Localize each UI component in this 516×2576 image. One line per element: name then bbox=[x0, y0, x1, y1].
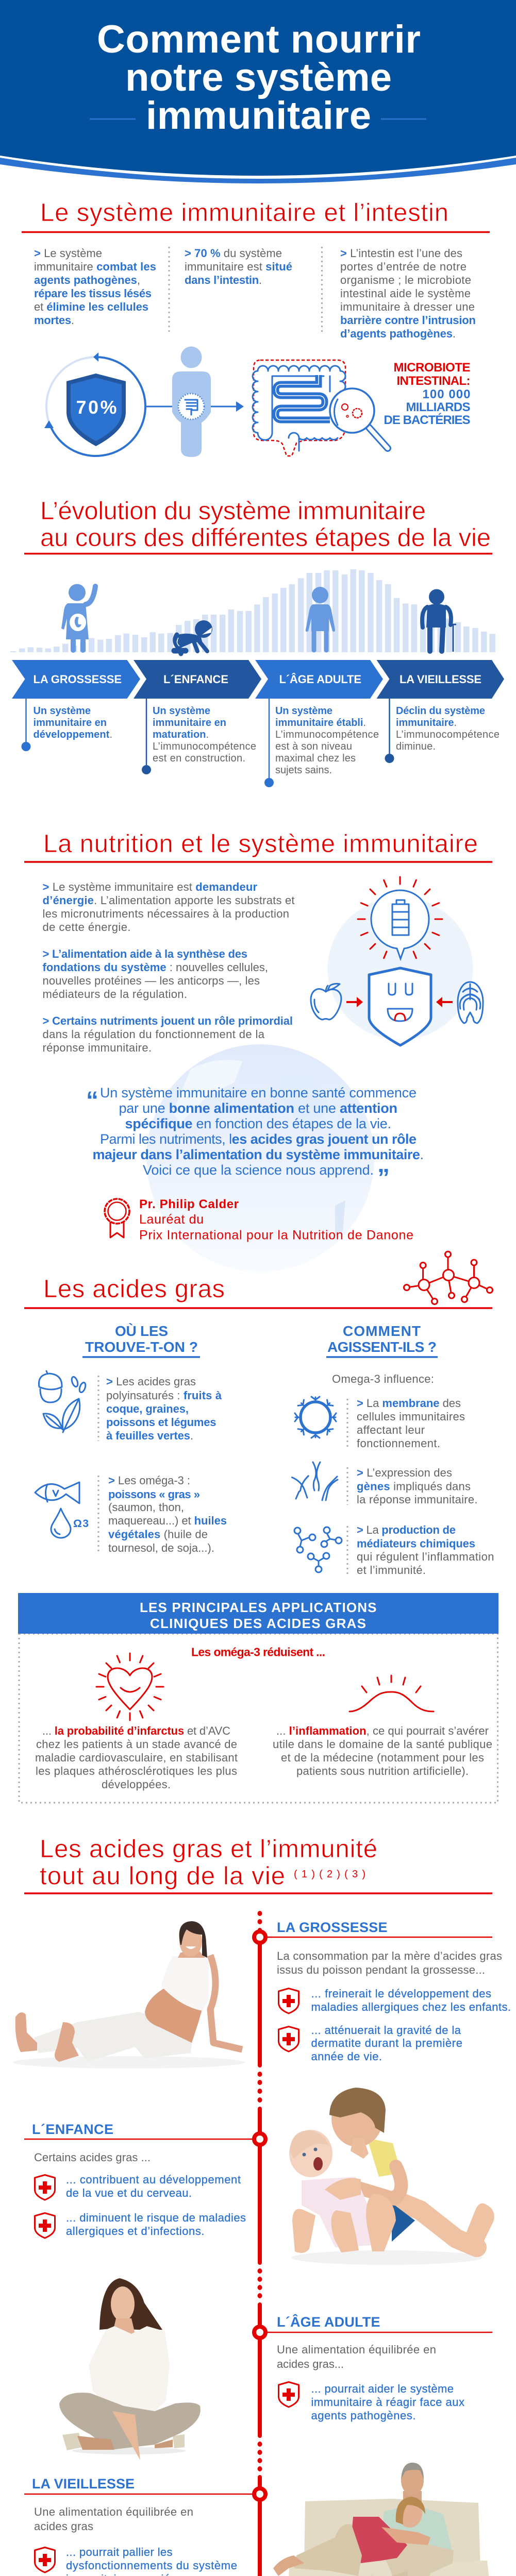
column heading: comment agissent-ils bbox=[326, 1323, 438, 1357]
arrow: apple to shield bbox=[346, 997, 363, 1007]
text: agents pathogènes: immunitaire à réagir face aux bbox=[311, 2396, 464, 2409]
callout: microbiote intestinal bbox=[384, 361, 470, 427]
text block: nutrition et énergie: > Certains nutriments jouent un rôle primordial bbox=[42, 1014, 293, 1027]
text: membrane: > La membrane des bbox=[357, 1397, 461, 1410]
stage text: la grossesse: Un système bbox=[33, 705, 91, 717]
photo: pregnant woman bbox=[13, 1921, 245, 2069]
column heading: où les trouve-t-on: TROUVE-T-ON ? bbox=[85, 1339, 198, 1355]
stage: l'âge adulte: Une alimentation équilibrée en bbox=[277, 2343, 436, 2356]
attribution: Philip Calder: Pr. Philip Calder bbox=[139, 1197, 239, 1211]
column heading: où les trouve-t-on: OÙ LES bbox=[115, 1323, 168, 1339]
icon: salmon steak bbox=[458, 982, 483, 1023]
text: allergies et infections bbox=[66, 2211, 246, 2238]
text: oméga-3 sources: (saumon, thon, bbox=[108, 1501, 184, 1514]
text: expression des gènes bbox=[357, 1466, 477, 1506]
callout: microbiote intestinal: INTESTINAL: bbox=[397, 374, 470, 388]
title: notre système bbox=[125, 56, 392, 99]
quote: Voici ce que la science nous apprend. bbox=[143, 1162, 374, 1178]
text: oméga-3 sources bbox=[108, 1474, 227, 1554]
background: globe bbox=[146, 1044, 374, 1272]
text: allergies et infections: allergiques et d’infections. bbox=[66, 2225, 204, 2238]
text: polyinsaturés sources: coque, graines, bbox=[106, 1402, 189, 1415]
text: agents pathogènes: agents pathogènes. bbox=[311, 2409, 415, 2422]
icon: crawling baby bbox=[174, 620, 212, 654]
stage text: l'âge adulte: immunitaire établi. bbox=[275, 717, 366, 728]
text: infarctus: les plaques athérosclérotiques les plus bbox=[36, 1765, 237, 1777]
text: inflammation: ... l’inflammation, ce qui pourrait s’avérer bbox=[276, 1724, 489, 1737]
text: oméga-3 sources: maquereau...) et huiles bbox=[108, 1514, 227, 1527]
text block: nutrition et énergie: médiateurs de la régulation. bbox=[42, 988, 187, 1001]
photo: elderly couple on a sofa bbox=[273, 2463, 490, 2576]
text block: nutrition et énergie: réponse immunitaire. bbox=[42, 1041, 152, 1054]
icon: smiling shield bbox=[369, 968, 431, 1045]
stage text: la grossesse bbox=[22, 699, 112, 751]
icon: pregnant woman bbox=[61, 584, 95, 650]
icon: inflammation curve bbox=[349, 1675, 434, 1711]
text: inflammation: et de la médecine (notamment pour les bbox=[281, 1751, 484, 1764]
stage: la vieillesse: Une alimentation équilibrée en bbox=[34, 2505, 193, 2518]
section heading: acides gras et immunité: tout au long de la vie bbox=[40, 1862, 285, 1890]
icon: shield cross bbox=[278, 2027, 299, 2052]
text: membrane: affectant leur bbox=[357, 1423, 425, 1436]
icon: shield cross bbox=[278, 2382, 299, 2407]
text: vue et cerveau: de la vue et du cerveau. bbox=[66, 2187, 192, 2199]
text: oméga-3 sources: végétales (huile de bbox=[108, 1528, 208, 1540]
stage text: l'âge adulte: sujets sains. bbox=[275, 765, 332, 776]
text: polyinsaturés sources: poissons et légumes bbox=[106, 1416, 217, 1429]
stage text: la vieillesse: immunitaire. bbox=[396, 717, 457, 728]
attribution: Philip Calder: Prix International pour la Nutrition de Danone bbox=[139, 1228, 413, 1243]
text column: rôle du système immunitaire: mortes. bbox=[34, 314, 74, 327]
quote: par une bonne alimentation et une attention bbox=[119, 1100, 397, 1116]
text: dermatite bbox=[311, 2024, 462, 2063]
text block: nutrition et énergie bbox=[42, 880, 295, 1054]
text: allergies et infections: ... diminuent le risque de maladies bbox=[66, 2211, 246, 2224]
stage: l'enfance: Certains acides gras ... bbox=[34, 2151, 151, 2164]
text: infarctus: maladie cardiovasculaire, en stabilisant bbox=[35, 1751, 238, 1764]
title: immunitaire bbox=[146, 94, 371, 138]
text: infarctus: ... la probabilité d’infarctus et d’AVC bbox=[42, 1724, 230, 1737]
text: membrane bbox=[357, 1397, 465, 1450]
stage: la grossesse: LA GROSSESSE bbox=[277, 1920, 388, 1935]
icon: award ribbon bbox=[105, 1199, 129, 1238]
column heading: comment agissent-ils: AGISSENT-ILS ? bbox=[327, 1339, 437, 1355]
text: maladies allergiques bbox=[311, 1987, 511, 2013]
text block: nutrition et énergie: dans la régulation du fonctionnement de la bbox=[42, 1028, 265, 1041]
text block: nutrition et énergie: > L’alimentation aide à la synthèse des bbox=[42, 947, 247, 960]
quote: Parmi les nutriments, les acides gras jouent un rôle bbox=[100, 1131, 417, 1147]
text: médiateurs chimiques: qui régulent l’inflammation bbox=[357, 1550, 494, 1563]
text: expression des gènes: gènes impliqués dans bbox=[357, 1480, 471, 1493]
timeline arrows: life stages bbox=[12, 660, 504, 699]
icon: fish and oil drop omega-3 bbox=[35, 1482, 89, 1538]
stage text: l'âge adulte: L’immunocompétence bbox=[275, 729, 379, 740]
stage text: la vieillesse: Déclin du système bbox=[396, 705, 485, 717]
stage text: l'âge adulte: maximal chez les bbox=[275, 753, 356, 764]
stage text: l'enfance: est en construction. bbox=[153, 753, 245, 764]
callout: microbiote intestinal: DE BACTÉRIES bbox=[384, 413, 470, 427]
section heading: évolution du système immunitaire bbox=[24, 497, 492, 554]
text column: l'intestin, porte d'entrée: portes d’entrée de notre bbox=[340, 260, 467, 273]
stage: l'enfance bbox=[32, 2122, 246, 2238]
text: infarctus bbox=[35, 1724, 238, 1791]
text: carences nutritionnelles: ... pourrait pallier les bbox=[66, 2546, 172, 2558]
text: inflammation bbox=[273, 1724, 492, 1777]
text block: nutrition et énergie: fondations du système : nouvelles cellules, bbox=[42, 961, 268, 974]
stage text: l'enfance: L’immunocompétence bbox=[153, 741, 256, 752]
stage text: la grossesse: immunitaire en bbox=[33, 717, 107, 728]
text column: rôle du système immunitaire: et élimine les cellules bbox=[34, 300, 148, 313]
panel header: LES PRINCIPALES APPLICATIONS bbox=[140, 1600, 376, 1615]
arrow: l'âge adulte bbox=[255, 660, 383, 699]
icon: food feeds happy shield with energy bbox=[311, 877, 483, 1045]
icon: intestine with microbiota magnifier bbox=[253, 360, 388, 456]
text column: rôle du système immunitaire bbox=[34, 247, 156, 327]
section heading: le système immunitaire et l'intestin: Le système immunitaire et l’intestin bbox=[40, 199, 448, 227]
stage text: la vieillesse bbox=[385, 699, 500, 763]
arrow: la vieillesse bbox=[376, 660, 504, 699]
text block: nutrition et énergie: les micronutriments nécessaires à la production bbox=[42, 907, 289, 920]
text: expression des gènes: la réponse immunitaire. bbox=[357, 1493, 477, 1506]
icon: cell membrane bbox=[295, 1397, 336, 1438]
stage text: l'enfance bbox=[142, 699, 256, 774]
icon: opening quote mark: “ bbox=[86, 1087, 98, 1114]
arrow: l'enfance bbox=[134, 660, 261, 699]
text: polyinsaturés sources: > Les acides gras bbox=[106, 1375, 196, 1388]
section heading: acides gras et immunité: ( 1 ) ( 2 ) ( 3 ) bbox=[294, 1869, 365, 1880]
stage: la vieillesse bbox=[32, 2476, 249, 2576]
arrow: l'enfance: L´ENFANCE bbox=[163, 673, 228, 686]
attribution: Philip Calder bbox=[105, 1197, 413, 1243]
section heading: acides gras et immunité bbox=[24, 1835, 492, 1893]
text: inflammation: patients sous nutrition artificielle). bbox=[296, 1765, 469, 1777]
text column: 70 % du système immunitaire bbox=[185, 247, 292, 286]
arrow: la grossesse: LA GROSSESSE bbox=[33, 673, 122, 686]
icon: shield 70% in cycle bbox=[44, 352, 145, 456]
stage text: l'enfance: Un système bbox=[153, 705, 210, 717]
callout: microbiote intestinal: 100 000 bbox=[423, 387, 470, 401]
panel header bbox=[18, 1593, 498, 1634]
icon: shield cross bbox=[35, 2547, 55, 2572]
text column: rôle du système immunitaire: > Le système bbox=[34, 247, 102, 260]
photo: woman thinking bbox=[59, 2278, 201, 2460]
text column: l'intestin, porte d'entrée: organisme ; le microbiote bbox=[340, 274, 471, 286]
title bbox=[97, 18, 421, 138]
stage: la grossesse: La consommation par la mère d’acides gras bbox=[277, 1950, 502, 1962]
text block: nutrition et énergie: nouvelles protéines — les anticorps —, les bbox=[42, 974, 260, 987]
arrow: salmon to shield bbox=[436, 997, 453, 1007]
stage text: la vieillesse: L’immunocompétence bbox=[396, 729, 500, 740]
text: infarctus: chez les patients à un stade avancé de bbox=[36, 1738, 237, 1751]
stage: la grossesse: issus du poisson pendant la grossesse... bbox=[277, 1963, 485, 1976]
text block: nutrition et énergie: > Le système immunitaire est demandeur bbox=[42, 880, 257, 893]
icon: shield cross bbox=[35, 2213, 55, 2238]
text: omega-3 influence: Omega-3 influence: bbox=[332, 1372, 434, 1385]
icon: fish and oil drop omega-3: Ω3 bbox=[73, 1518, 89, 1530]
quote: spécifique en fonction des étapes de la vie. bbox=[125, 1116, 391, 1131]
text: dermatite: ... atténuerait la gravité de la bbox=[311, 2024, 461, 2037]
text column: 70 % du système immunitaire: > 70 % du système bbox=[185, 247, 282, 260]
panel header: CLINIQUES DES ACIDES GRAS bbox=[150, 1616, 366, 1631]
text column: l'intestin, porte d'entrée: barrière contre l’intrusion bbox=[340, 314, 476, 327]
stage: la grossesse bbox=[277, 1920, 511, 2063]
icon: elderly person with cane bbox=[422, 589, 456, 652]
quote bbox=[86, 1085, 424, 1192]
callout: microbiote intestinal: MILLIARDS bbox=[406, 400, 470, 414]
callout: microbiote intestinal: MICROBIOTE bbox=[394, 361, 470, 375]
arrow: la vieillesse: LA VIEILLESSE bbox=[400, 673, 481, 686]
stage text: l'âge adulte bbox=[264, 699, 379, 787]
text: médiateurs chimiques bbox=[357, 1523, 494, 1577]
stage: la vieillesse: LA VIEILLESSE bbox=[32, 2476, 135, 2492]
text column: l'intestin, porte d'entrée bbox=[340, 247, 476, 340]
panel: applications cliniques bbox=[18, 1593, 498, 1803]
attribution: Philip Calder: Lauréat du bbox=[139, 1212, 204, 1227]
text column: l'intestin, porte d'entrée: immunitaire à dresser une bbox=[340, 300, 475, 313]
subheading: Les oméga-3 réduisent ... bbox=[191, 1646, 325, 1659]
arrow: from shield through body to gut bbox=[146, 401, 244, 412]
text: agents pathogènes: ... pourrait aider le système bbox=[311, 2382, 454, 2395]
icon: chemical mediators bbox=[294, 1527, 342, 1572]
stage text: l'âge adulte: Un système bbox=[275, 705, 332, 717]
text: oméga-3 sources: poissons « gras » bbox=[108, 1488, 200, 1501]
text: polyinsaturés sources bbox=[106, 1375, 222, 1442]
section heading: acides gras et immunité: Les acides gras et l’immunité bbox=[40, 1835, 377, 1863]
text: inflammation: utile dans le domaine de la santé publique bbox=[273, 1738, 492, 1751]
icon: adult bbox=[306, 587, 335, 650]
text: dermatite: dermatite durant la première bbox=[311, 2037, 462, 2049]
text: agents pathogènes bbox=[311, 2382, 464, 2422]
stage text: l'enfance: maturation. bbox=[153, 729, 209, 740]
text: oméga-3 sources: tournesol, de soja...). bbox=[108, 1541, 214, 1554]
text: médiateurs chimiques: médiateurs chimiques bbox=[357, 1537, 475, 1550]
section heading: évolution du système immunitaire: L’évolution du système immunitaire bbox=[40, 497, 426, 525]
text column: rôle du système immunitaire: agents pathogènes, bbox=[34, 274, 140, 286]
text column: l'intestin, porte d'entrée: intestinal aide le système bbox=[340, 287, 471, 300]
text: vue et cerveau: ... contribuent au développement bbox=[66, 2173, 241, 2186]
icon: nuts, seeds and leaves bbox=[39, 1371, 87, 1432]
bar chart: immunocompétence au fil de la vie bbox=[10, 569, 495, 652]
text: maladies allergiques: maladies allergiques chez les enfants. bbox=[311, 2001, 511, 2013]
text: carences nutritionnelles bbox=[66, 2546, 249, 2576]
icon: shield 70% in cycle: 70% bbox=[76, 397, 116, 418]
text: maladies allergiques: ... freinerait le développement des bbox=[311, 1987, 491, 2000]
stage text: l'âge adulte: est à son niveau bbox=[275, 741, 352, 752]
text: infarctus: développées. bbox=[102, 1778, 171, 1791]
quote: majeur dans l’alimentation du système immunitaire. bbox=[93, 1147, 424, 1162]
text: dermatite: année de vie. bbox=[311, 2050, 382, 2063]
quote: Un système immunitaire en bonne santé commence bbox=[100, 1085, 417, 1100]
section heading: la nutrition: La nutrition et le système immunitaire bbox=[43, 830, 478, 858]
icon: smiling heart bbox=[96, 1653, 163, 1720]
text: médiateurs chimiques: et l’immunité. bbox=[357, 1564, 426, 1577]
column heading: comment agissent-ils: COMMENT bbox=[343, 1323, 421, 1339]
stage text: la vieillesse: diminue. bbox=[396, 741, 436, 752]
arrow: l'âge adulte: L´ÂGE ADULTE bbox=[279, 673, 361, 686]
text: vue et cerveau bbox=[66, 2173, 241, 2199]
stage: l'âge adulte: acides gras... bbox=[277, 2358, 344, 2370]
text: polyinsaturés sources: polyinsaturés : fruits à bbox=[106, 1389, 222, 1402]
stage: l'âge adulte: L´ÂGE ADULTE bbox=[277, 2314, 380, 2330]
text: membrane: cellules immunitaires bbox=[357, 1410, 465, 1423]
text column: rôle du système immunitaire: répare les tissus lésés bbox=[34, 287, 152, 300]
text column: rôle du système immunitaire: immunitaire combat les bbox=[34, 260, 156, 273]
stage: l'âge adulte bbox=[277, 2314, 464, 2422]
text column: 70 % du système immunitaire: immunitaire est situé bbox=[185, 260, 292, 273]
icon: shield cross bbox=[35, 2175, 55, 2200]
icon: energy bubble with battery bbox=[358, 877, 442, 959]
stage text: l'enfance: immunitaire en bbox=[153, 717, 226, 728]
section heading: les acides gras: Les acides gras bbox=[43, 1275, 225, 1303]
text: polyinsaturés sources: à feuilles vertes. bbox=[106, 1429, 193, 1442]
icon: chromosomes bbox=[292, 1462, 338, 1500]
icon: human body with gut bbox=[172, 346, 211, 457]
text block: nutrition et énergie: d’énergie. L’alimentation apporte les substrats et bbox=[42, 894, 295, 907]
arrow: la grossesse bbox=[12, 660, 140, 699]
icon: apple bbox=[311, 984, 341, 1020]
section heading: évolution du système immunitaire: au cours des différentes étapes de la vie bbox=[40, 524, 491, 552]
timeline: red axis with rings and arrow bbox=[24, 1911, 492, 2576]
icon: closing quote mark: ” bbox=[377, 1164, 390, 1192]
text block: nutrition et énergie: de cette énergie. bbox=[42, 921, 131, 934]
stage: l'enfance: L´ENFANCE bbox=[32, 2122, 113, 2137]
text: oméga-3 sources: > Les oméga-3 : bbox=[108, 1474, 190, 1487]
column heading: où les trouve-t-on bbox=[82, 1323, 200, 1357]
icon: shield cross bbox=[278, 1989, 299, 2013]
text column: l'intestin, porte d'entrée: d’agents pathogènes. bbox=[340, 327, 456, 340]
text: membrane: fonctionnement. bbox=[357, 1437, 440, 1450]
title: Comment nourrir bbox=[97, 18, 421, 61]
header banner bbox=[0, 0, 516, 183]
text column: l'intestin, porte d'entrée: > L’intestin est l’une des bbox=[340, 247, 462, 260]
text: expression des gènes: > L’expression des bbox=[357, 1466, 452, 1479]
photo: two children bbox=[289, 2088, 494, 2265]
icon: red molecule bbox=[404, 1251, 493, 1304]
text: médiateurs chimiques: > La production de bbox=[357, 1523, 456, 1536]
text column: 70 % du système immunitaire: dans l’intestin. bbox=[185, 274, 262, 286]
stage: la vieillesse: acides gras bbox=[34, 2520, 93, 2533]
stage text: la grossesse: développement. bbox=[33, 729, 112, 740]
text: carences nutritionnelles: dysfonctionnements du système bbox=[66, 2559, 237, 2572]
